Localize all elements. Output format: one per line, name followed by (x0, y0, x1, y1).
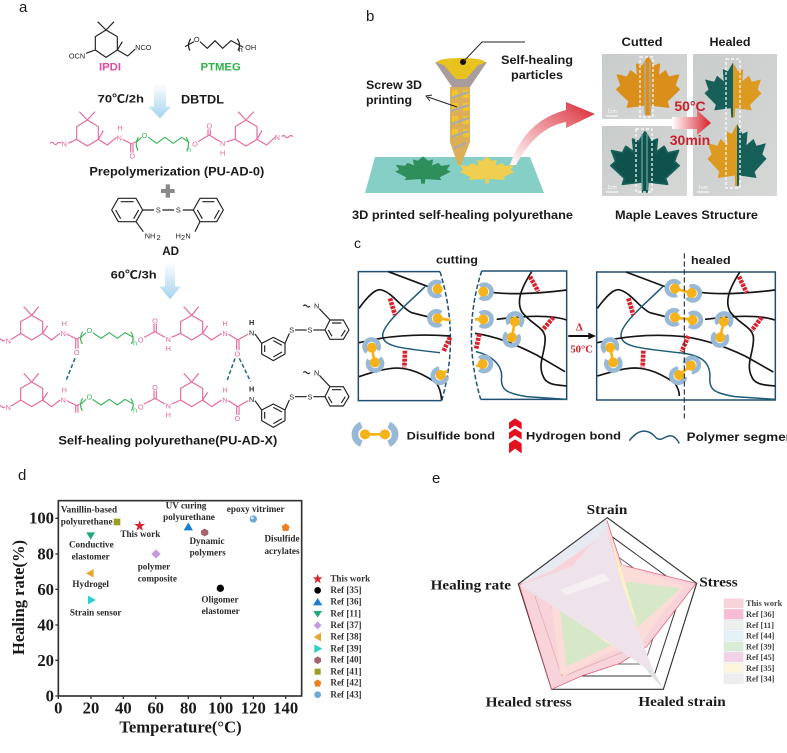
upper polymer chain: S (289, 326, 294, 335)
build plate (365, 157, 544, 193)
AD structure: NH (145, 232, 155, 241)
AD label: AD (162, 245, 179, 258)
ref 11 main pale polygon (520, 522, 655, 675)
chart legend: Ref [42] (330, 678, 362, 688)
text self-healing particles: Self-healing (501, 53, 573, 67)
radar data polygons (519, 519, 696, 689)
photo: healed leaves (693, 54, 777, 196)
upper polymer chain: O (86, 326, 92, 335)
point annotations: Disulfide (264, 534, 300, 544)
x axis ticks: 60 (147, 698, 164, 717)
photo: cut orange leaf (602, 54, 687, 119)
lower polymer chain: N (314, 368, 319, 377)
highlight streak (560, 573, 610, 595)
heating arrow: Δ (576, 323, 583, 334)
upper polymer chain: O (74, 348, 80, 357)
50C label: 50°C (674, 98, 706, 114)
chart legend: Ref [36] (330, 597, 362, 607)
point annotations (61, 500, 300, 618)
30min label: 30min (670, 132, 710, 148)
y axis ticks: 80 (37, 544, 54, 563)
PTMEG structure: O (194, 35, 200, 44)
category labels: Healed stress (486, 695, 572, 710)
upper polymer chain: H (62, 319, 67, 328)
box middle: cut half (471, 271, 567, 399)
radar legend: Ref [45] (746, 653, 775, 662)
upper polymer chain: N (6, 336, 11, 345)
legend: hydrogen bond (509, 418, 621, 453)
prepolymer structure: O (141, 131, 147, 140)
chart legend: Ref [11] (330, 608, 361, 618)
y axis ticks: 20 (37, 651, 54, 670)
point annotations: Vanillin-based (61, 505, 117, 515)
y axis title: Healing rate(%) (9, 540, 28, 655)
IPDI structure: NCO (135, 43, 152, 52)
upper polymer chain: N (222, 329, 228, 338)
label e: e (432, 470, 440, 487)
prepolymer structure: O (129, 151, 135, 160)
photo: cut green leaf: 1cm (607, 185, 617, 191)
AD structure: H (176, 232, 181, 241)
legend: polymer segment: Polymer segment (687, 430, 787, 444)
upper polymer chain: N (314, 302, 319, 311)
category labels: Healing rate (431, 577, 511, 592)
ref 35 yellow slivers (575, 530, 638, 651)
leader line to particles (460, 42, 525, 65)
PTMEG label: PTMEG (201, 62, 241, 74)
caption 3D printed: 3D printed self-healing polyurethane (352, 208, 573, 222)
final polymer caption: Self-healing polyurethane(PU-AD-X) (58, 434, 277, 447)
lower polymer chain: S (289, 392, 294, 401)
chart legend: Ref [40] (330, 655, 362, 665)
legend: disulfide bond: Disulfide bond (407, 430, 495, 442)
panel e: radar chart (431, 470, 783, 710)
arrow to screw (426, 95, 457, 107)
PTMEG structure: OH (245, 43, 256, 52)
AD structure: N (185, 232, 191, 241)
point annotations: polyurethane (163, 512, 215, 522)
x axis ticks (54, 698, 298, 717)
lower polymer chain: N (61, 396, 66, 405)
lower polymer chain: O (138, 402, 144, 411)
x axis title: Temperature(°C) (119, 717, 242, 736)
prepolymer structure: O (206, 122, 212, 131)
radar legend: Ref [35] (746, 664, 775, 673)
legend: polymer segment (629, 430, 787, 444)
photo: cut orange leaf: 1cm (607, 109, 617, 115)
text particles: particles (511, 68, 563, 82)
x axis ticks: 100 (208, 698, 233, 717)
chart legend: Ref [41] (330, 666, 362, 676)
radar legend: Ref [36] (746, 610, 775, 619)
photo headings cutted: Cutted (622, 35, 662, 49)
AD structure: 2 (181, 233, 185, 242)
point annotations: polyurethane (61, 517, 113, 527)
point annotations: Conductive (69, 540, 114, 550)
radar legend: Ref [39] (746, 642, 775, 651)
green printed leaf (396, 156, 450, 184)
x axis ticks: 20 (83, 698, 99, 717)
point annotations: acrylates (264, 546, 300, 556)
upper synthesis scheme (50, 22, 293, 242)
prepolymer structure: N (220, 139, 225, 148)
upper polymer chain: H (222, 319, 228, 328)
lower polymer chain: N (166, 402, 171, 411)
arrow: first reaction step (148, 83, 171, 118)
upper polymer chain: O (152, 316, 158, 325)
heating arrow (568, 323, 596, 356)
point annotations: Dynamic (189, 536, 225, 546)
chart frame and ticks (55, 501, 302, 699)
upper polymer chain: H (166, 344, 171, 353)
lower polymer chain (0, 368, 349, 427)
lower polymer chain: O (152, 383, 158, 392)
PTMEG structure: n (239, 45, 243, 54)
upper polymer chain: N (249, 328, 254, 337)
heating arrow: 50°C (570, 345, 593, 356)
lower polymer chain: N (249, 395, 254, 404)
category labels: Stress (699, 575, 738, 590)
upper polymer chain (0, 302, 349, 361)
category labels: Strain (587, 502, 628, 517)
AD structure: S (176, 206, 181, 215)
photo: cut green leaf (602, 126, 687, 196)
prepolymer structure: N (275, 133, 280, 142)
point annotations: Strain sensor (70, 608, 121, 618)
ref 39 polygon (560, 582, 681, 667)
photo headings healed: Healed (710, 35, 750, 49)
lower polymer chain: n (133, 405, 137, 414)
label c: c (354, 235, 361, 251)
lower polymer chain: N (222, 396, 228, 405)
PTMEG structure (185, 35, 256, 54)
point annotations: polymer (138, 561, 170, 571)
lower polymer chain: O (234, 414, 240, 423)
x axis ticks: 140 (273, 698, 298, 717)
x axis ticks: 40 (115, 698, 132, 717)
lower polymer chain: S (308, 392, 313, 401)
arrow between photos (672, 110, 711, 135)
yellow printed leaf (460, 156, 514, 184)
reaction condition 60C: 60℃/3h (111, 269, 157, 281)
chart legend: Ref [35] (330, 585, 362, 595)
prepolymer structure (50, 112, 293, 160)
category labels: Healed strain (638, 694, 726, 709)
radar legend: Ref [11] (746, 621, 774, 630)
lower polymer chain: H (222, 386, 228, 395)
this work polygon (519, 521, 696, 689)
catalyst DBTDL: DBTDL (181, 93, 224, 106)
screw printer nozzle (435, 58, 487, 165)
prepolymer structure: H (117, 124, 123, 133)
point annotations: composite (138, 573, 177, 583)
upper polymer chain: n (133, 339, 137, 348)
x axis ticks: 80 (180, 698, 197, 717)
legend: hydrogen bond: Hydrogen bond (526, 430, 621, 442)
x axis ticks: 120 (241, 698, 266, 717)
y axis ticks: 100 (29, 509, 54, 528)
label d: d (18, 467, 26, 484)
data markers (86, 515, 290, 604)
prepolymer structure: N (62, 140, 67, 149)
lower polymer chain: N (6, 403, 11, 412)
heading cutting: cutting (436, 254, 478, 266)
lower polymer chain: H (166, 411, 171, 420)
arrow: second reaction step (159, 262, 181, 299)
radar grid (518, 518, 697, 689)
point annotations: epoxy vitrimer (227, 504, 285, 514)
prepolymer structure: H (220, 149, 225, 158)
panel d: scatter chart (9, 467, 371, 736)
chart legend: Ref [43] (330, 689, 362, 699)
IPDI label: IPDI (99, 62, 121, 74)
chart legend: This work (330, 574, 371, 584)
ref 36 peach polygon (552, 565, 685, 676)
legend: disulfide bond (355, 425, 495, 444)
inner light outlines (535, 565, 681, 676)
hydrogen bond dashes (66, 358, 251, 382)
AD structure: S (156, 206, 161, 215)
upper polymer chain: H (249, 318, 254, 327)
box right: healed network (597, 272, 775, 400)
ref 45 rose wedge (520, 572, 572, 588)
photo: healed leaves: 1cm (698, 185, 708, 191)
point annotations: polymers (190, 548, 226, 558)
upper polymer chain: N (166, 335, 171, 344)
panel b: 3D printing and maple leaves (352, 8, 777, 222)
panel a: synthesis route (0, 0, 349, 447)
radar legend (724, 599, 783, 684)
radar legend: Ref [34] (746, 675, 775, 684)
point annotations: elastomer (72, 552, 110, 562)
IPDI structure (69, 22, 152, 60)
point annotations: elastomer (202, 606, 240, 616)
upper polymer chain: O (234, 350, 240, 359)
curved red arrow (510, 102, 595, 165)
lower synthesis scheme (0, 245, 349, 447)
y axis ticks (29, 509, 54, 705)
box left: cut half (358, 272, 450, 401)
text printing: printing (366, 93, 412, 107)
point annotations: UV curing (166, 500, 207, 510)
panel c: healing mechanism (354, 235, 787, 453)
point annotations: Oligomer (201, 594, 239, 604)
text screw 3D: Screw 3D (366, 78, 422, 92)
upper polymer chain: N (61, 329, 66, 338)
chart legend (313, 574, 371, 699)
point annotations: Hydrogel (72, 579, 109, 589)
upper polymer chain: S (308, 326, 313, 335)
radar legend: This work (746, 599, 783, 608)
label b: b (366, 8, 374, 25)
IPDI structure: OCN (69, 51, 85, 60)
ref 44 pale blue polygon (520, 519, 607, 584)
prepolymer structure: n (187, 145, 191, 154)
y axis ticks: 60 (37, 580, 54, 599)
lower polymer chain: O (86, 393, 92, 402)
prepolymer caption: Prepolymerization (PU-AD-0) (89, 166, 264, 179)
plus sign (161, 184, 175, 198)
healed strain tip (643, 665, 663, 689)
category labels (431, 502, 738, 710)
reaction condition 70C: 70℃/2h (98, 94, 144, 106)
y axis ticks: 0 (46, 686, 54, 705)
point annotations: This work (120, 529, 161, 539)
radar legend: Ref [44] (746, 632, 775, 641)
prepolymer structure: N (117, 134, 122, 143)
prepolymer structure: O (192, 140, 198, 149)
upper polymer chain: O (138, 336, 144, 345)
lower polymer chain: H (249, 385, 254, 394)
centre dashed cut line (683, 253, 686, 418)
chart legend: Ref [37] (330, 620, 362, 630)
heading healed: healed (691, 255, 731, 267)
caption maple leaves: Maple Leaves Structure (615, 208, 758, 222)
lower polymer chain: H (62, 386, 67, 395)
y axis ticks: 40 (37, 615, 54, 634)
AD structure (112, 198, 223, 242)
x axis ticks: 0 (54, 698, 62, 717)
AD structure: 2 (157, 233, 161, 242)
chart legend: Ref [38] (330, 632, 362, 642)
chart legend: Ref [39] (330, 643, 362, 653)
